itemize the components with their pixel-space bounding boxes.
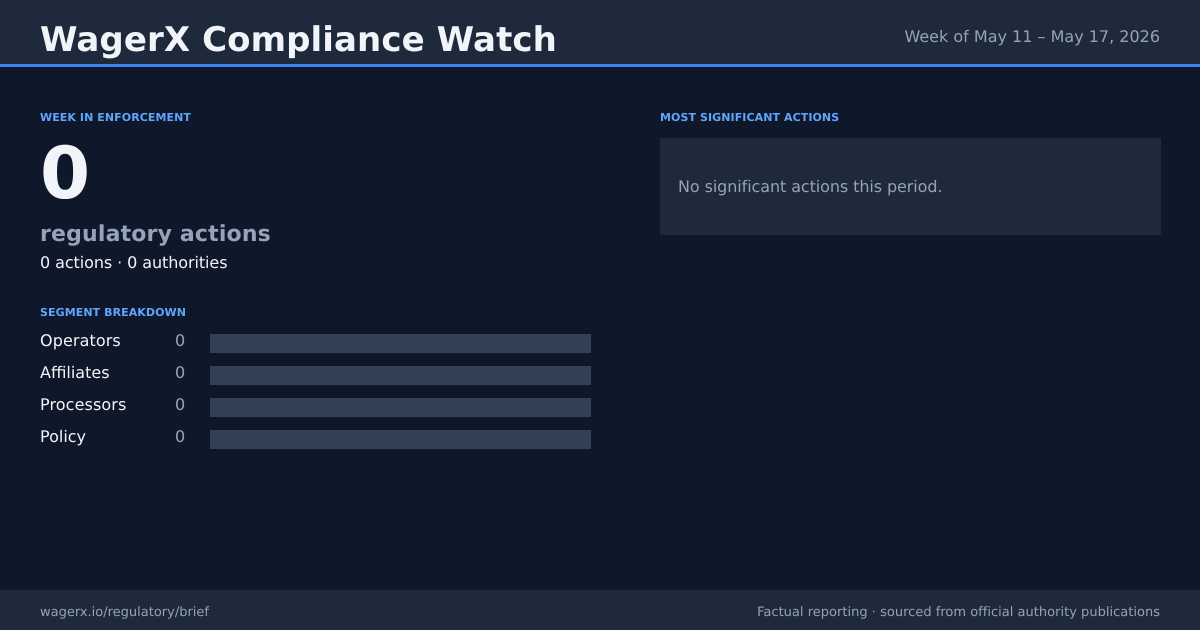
section label: SEGMENT BREAKDOWN: [40, 306, 186, 319]
big number: 0: [40, 131, 90, 215]
footer band: [0, 590, 1200, 630]
section label: WEEK IN ENFORCEMENT: [40, 111, 191, 124]
date range: Week of May 11 – May 17, 2026: [904, 27, 1160, 46]
header band: [0, 0, 1200, 67]
row: processors: [40, 395, 591, 417]
footer note: Factual reporting · sourced from official authority publications: [757, 605, 1160, 620]
row: processors: Processors: [40, 395, 126, 414]
row: operators: Operators: [40, 331, 121, 350]
row: affiliates: [40, 363, 591, 385]
row: affiliates: 0: [175, 363, 185, 382]
panel: segment breakdown: [40, 306, 591, 449]
row: operators: 0: [175, 331, 185, 350]
empty state message: No significant actions this period.: [678, 177, 942, 196]
row: policy: Policy: [40, 427, 86, 446]
title: WagerX Compliance Watch: [40, 20, 557, 60]
panel: most significant actions: [660, 138, 1161, 235]
section label: most significant actions: MOST SIGNIFICANT ACTIONS: [660, 111, 839, 124]
footer url: wagerx.io/regulatory/brief: [40, 605, 209, 620]
row: policy: [40, 427, 591, 449]
row: processors: 0: [175, 395, 185, 414]
subheading: regulatory actions: [40, 222, 271, 247]
row: policy: 0: [175, 427, 185, 446]
panel: week in enforcement: [40, 111, 271, 272]
row: affiliates: Affiliates: [40, 363, 110, 382]
row: operators: [40, 331, 591, 353]
summary line: 0 actions · 0 authorities: [40, 253, 227, 272]
